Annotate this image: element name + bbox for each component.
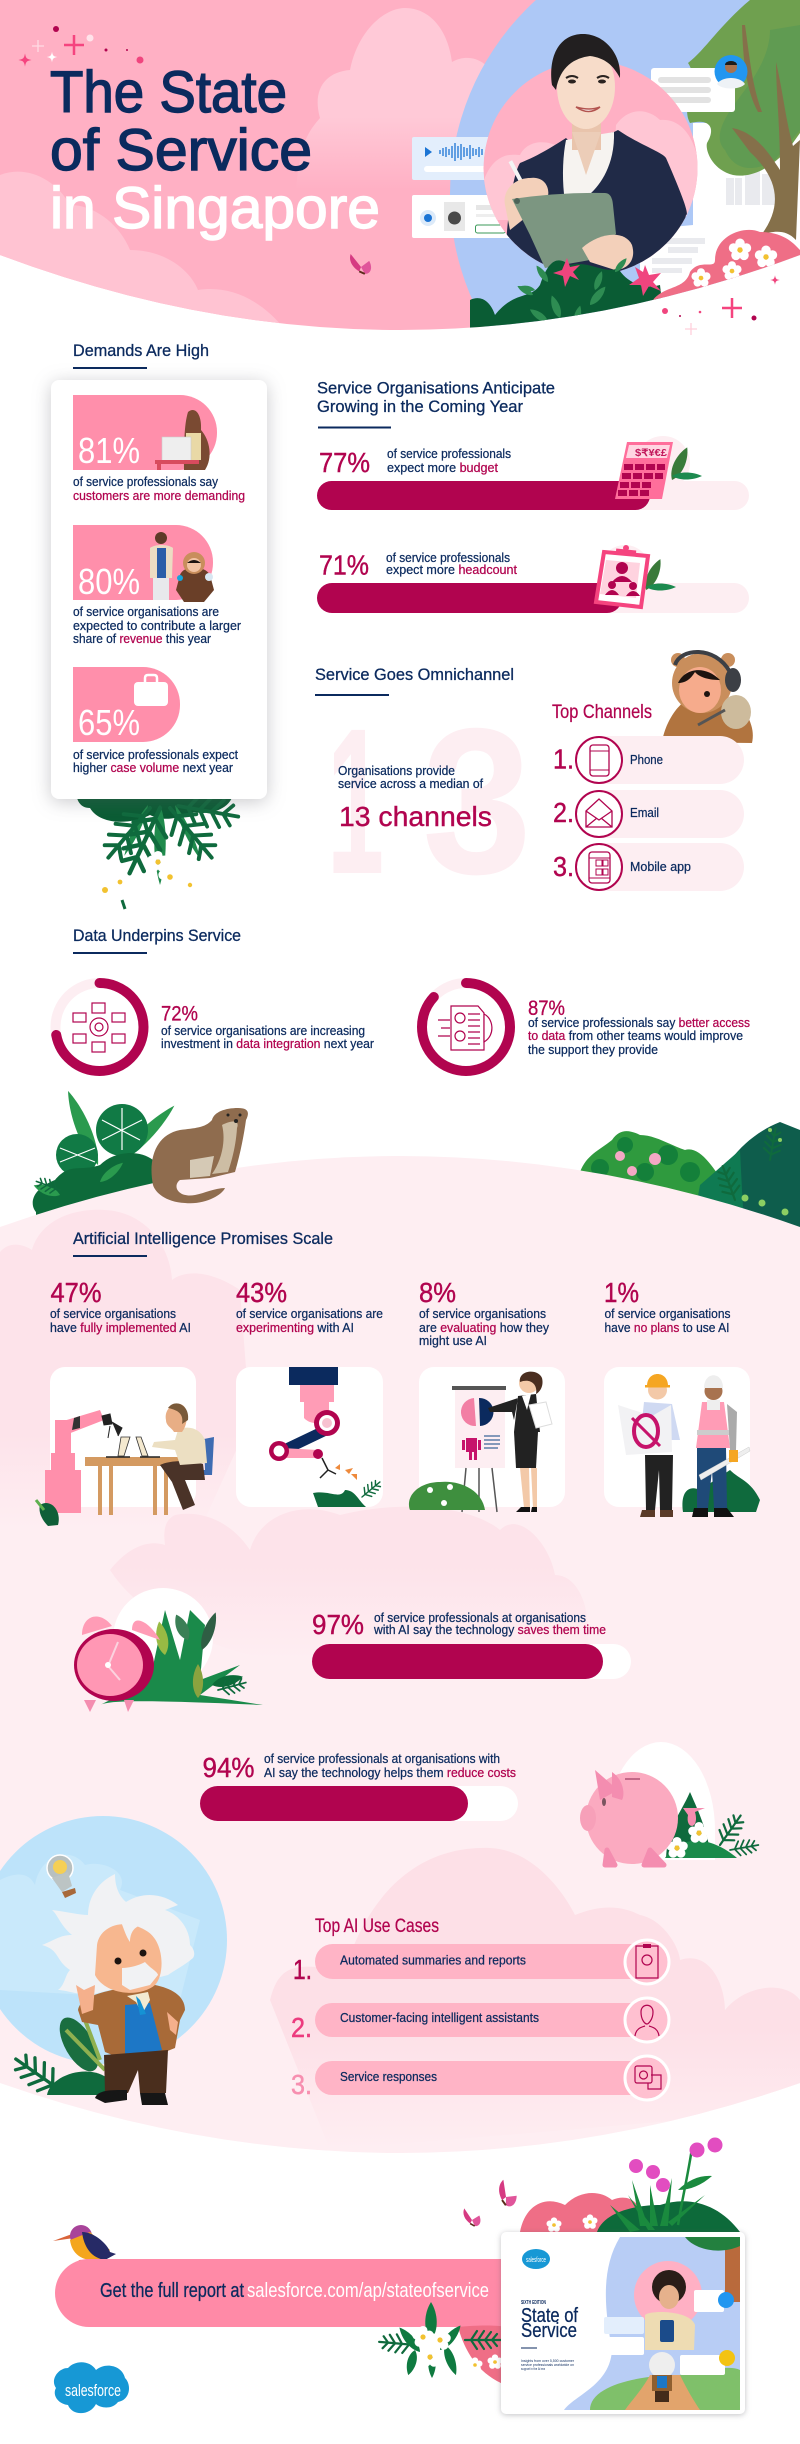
head	[95, 1924, 162, 1993]
use case 1	[293, 1940, 669, 1985]
bar: 77% budget	[317, 436, 749, 510]
audio card	[412, 137, 490, 180]
blue circle backdrop	[450, 0, 800, 326]
stat: 81%: 81%	[78, 430, 140, 471]
stat: 1% no plans: have no plans to use AI	[604, 1320, 730, 1335]
bar: 77% budget: expect more budget	[387, 460, 498, 475]
chat card	[651, 55, 748, 112]
card: presenter at flip chart	[409, 1367, 565, 1512]
stat: 87% data access: the support they provide	[528, 1042, 658, 1057]
panel: call to action: Get the full report at	[100, 2280, 244, 2302]
pink flowers	[553, 258, 661, 296]
foliage	[8, 2011, 110, 2101]
stat: 80%: share of revenue this year	[73, 631, 212, 646]
stat: 80%	[73, 525, 242, 646]
panel: report cover	[501, 2232, 745, 2414]
bar: 71% headcount: of service professionals	[386, 550, 510, 565]
card: robot arm and worker	[45, 1367, 214, 1515]
icon: light bulb	[47, 1855, 76, 1898]
heading: service organisations anticipate growing	[317, 378, 555, 428]
stat: 8% evaluating: are evaluating how they	[419, 1320, 549, 1335]
stat: 94% reduce costs: 94%	[202, 1752, 254, 1783]
stat: 72% data integration	[56, 983, 375, 1071]
channel 3: mobile app: 3.	[553, 851, 574, 882]
illustration: left jungle	[32, 1088, 179, 1222]
channel 3: mobile app	[553, 843, 744, 891]
use case 1: 1.	[293, 1954, 312, 1985]
bar: 71% headcount: 71%	[319, 550, 369, 580]
panel: top AI use cases: Top AI Use Cases	[315, 1916, 439, 1937]
icon: calculator: $₹¥€£	[635, 448, 667, 459]
heading: artificial intelligence promises scale: Artificial Intelligence Promises Scale	[73, 1229, 333, 1248]
hero banner	[0, 0, 800, 330]
stat: 72% data integration: of service organisations are increasing	[161, 1023, 365, 1038]
logo: salesforce: salesforce	[65, 2381, 121, 2400]
heading: demands are high	[73, 341, 209, 369]
channel 2: email	[553, 790, 744, 838]
channel 1: phone: 1.	[553, 744, 574, 774]
stat: 97% saves time	[74, 1588, 631, 1712]
big number 13: 3	[422, 686, 532, 918]
text: median channels	[338, 763, 492, 832]
stat: 43% experimenting: experimenting with AI	[236, 1320, 354, 1335]
stat: 80%: 80%	[78, 561, 140, 602]
stat: 8% evaluating: might use AI	[419, 1333, 487, 1348]
building	[640, 123, 800, 300]
illustration: cta foliage	[378, 2302, 505, 2385]
stat: 65%: higher case volume next year	[73, 760, 234, 775]
panel: call to action	[55, 2259, 520, 2327]
icon: document checklist	[438, 1006, 492, 1050]
icon: alarm clock with plants	[74, 1588, 263, 1712]
woman hands and tablet	[505, 160, 633, 270]
big number 13	[327, 686, 532, 918]
icon: mascot with headset	[662, 652, 753, 743]
bar: 71% headcount: expect more headcount	[386, 562, 517, 577]
icon: calculator	[615, 442, 702, 499]
body	[78, 1985, 185, 2060]
title: of Service	[50, 118, 312, 183]
cover blurb: support in the AI era	[521, 2366, 546, 2371]
bar: 77% budget: 77%	[319, 447, 370, 478]
illustration: orchids and bush	[520, 2138, 740, 2232]
stat: 47% fully implemented: of service organisations	[50, 1306, 176, 1321]
avatar	[714, 55, 748, 88]
stat: 65%: of service professionals expect	[73, 747, 238, 762]
use case 3: Service responses	[340, 2069, 437, 2084]
title	[50, 60, 380, 241]
woman head	[551, 34, 620, 175]
pale pink lower section	[0, 1156, 800, 2153]
channel 3: mobile app: Mobile app	[630, 859, 691, 874]
stat: 43% experimenting: 43%	[236, 1277, 287, 1308]
heading: service goes omnichannel: Service Goes Omnichannel	[315, 665, 514, 684]
hero clouds	[0, 8, 492, 340]
channel 2: email: 2.	[553, 797, 574, 828]
pink bush	[653, 230, 800, 300]
stat: 72% data integration: investment in data integration next year	[161, 1036, 375, 1051]
icon: man and mascot	[150, 532, 214, 602]
stat: 43% experimenting	[236, 1277, 384, 1507]
stat: 81%: of service professionals say	[73, 474, 218, 489]
card: robot arm with plant	[236, 1367, 384, 1507]
card: construction workers	[604, 1367, 760, 1517]
illustration: mascot Einstein	[0, 1816, 227, 2105]
cover logo	[522, 2249, 550, 2269]
use case 2: 2.	[291, 2012, 312, 2043]
panel: top channels	[552, 652, 753, 891]
text: median channels: Organisations provide	[338, 763, 455, 778]
sparkles lower right	[662, 275, 780, 335]
heading: service organisations anticipate growing: Growing in the Coming Year	[317, 397, 523, 416]
stat: 8% evaluating	[409, 1277, 565, 1512]
logo: salesforce	[54, 2362, 129, 2413]
stat: 8% evaluating: of service organisations	[419, 1306, 546, 1321]
stat: 65%: 65%	[78, 702, 140, 743]
cover blurb: service professionals worldwide on	[521, 2362, 574, 2367]
stat: 47% fully implemented: have fully implemented AI	[50, 1320, 191, 1335]
text: median channels: service across a median of	[338, 776, 483, 791]
stat: 72% data integration: 72%	[161, 1002, 198, 1026]
cover logo: salesforce	[526, 2257, 546, 2264]
icon: butterfly small	[463, 2206, 481, 2228]
icon: person at desk	[155, 410, 210, 470]
icon: butterfly large	[495, 2179, 520, 2208]
stat: 87% data access: to data from other teams would improve	[528, 1028, 743, 1043]
small foliage	[36, 1500, 59, 1526]
stat: 94% reduce costs: AI say the technology helps them reduce costs	[264, 1765, 516, 1780]
use case 2: Customer-facing intelligent assistants	[340, 2010, 539, 2025]
stat: 43% experimenting: of service organisations are	[236, 1306, 383, 1321]
stat: 1% no plans: 1%	[604, 1277, 639, 1308]
stat: 87% data access	[422, 983, 750, 1071]
stat: 97% saves time: of service professionals at organisations	[374, 1610, 586, 1625]
stat: 87% data access: 87%	[528, 997, 565, 1020]
bar: 71% headcount	[317, 545, 749, 613]
title: in Singapore	[50, 176, 380, 241]
panel: call to action: salesforce.com/ap/stateofservice	[247, 2280, 489, 2302]
use case 2	[291, 1998, 669, 2043]
product card	[412, 195, 512, 238]
stat: 87% data access: of service professionals say better access	[528, 1015, 750, 1030]
panel: demands card	[51, 380, 267, 799]
stat: 47% fully implemented	[36, 1277, 214, 1526]
heading: demands are high: Demands Are High	[73, 341, 209, 360]
use case 1: Automated summaries and reports	[340, 1952, 526, 1968]
stat: 97% saves time: with AI say the technology saves them time	[373, 1622, 606, 1637]
channel 1: phone: Phone	[630, 752, 663, 767]
bar: 77% budget: of service professionals	[387, 446, 511, 461]
stat: 80%: expected to contribute a larger	[73, 618, 242, 633]
section clouds	[0, 1210, 800, 2150]
hero sparkles	[18, 26, 143, 67]
icon: briefcase	[134, 675, 168, 706]
panel: top channels: Top Channels	[552, 702, 652, 723]
stat: 94% reduce costs	[200, 1742, 760, 1865]
title: The State	[50, 60, 287, 125]
panel: report cover: SIXTH EDITION	[521, 2300, 546, 2306]
icon: clipboard	[596, 545, 676, 607]
use case 3: 3.	[291, 2069, 312, 2100]
stat: 97% saves time: 97%	[312, 1609, 364, 1640]
cover blurb	[521, 2358, 575, 2371]
stat: 80%: of service organisations are	[73, 604, 219, 619]
tree	[687, 0, 800, 240]
text: median channels: 13 channels	[339, 801, 492, 832]
stat: 8% evaluating: 8%	[419, 1277, 456, 1308]
stat: 1% no plans: of service organisations	[604, 1306, 731, 1321]
illustration: right jungle	[579, 1122, 800, 1240]
woman photo	[484, 61, 700, 280]
donut chart 87	[422, 983, 510, 1071]
donut chart 72	[56, 983, 144, 1071]
stat: 1% no plans	[604, 1277, 760, 1517]
stat: 81%: customers are more demanding	[73, 488, 245, 503]
big number 13: 1	[327, 686, 384, 918]
foreground foliage	[470, 258, 662, 328]
heading: service organisations anticipate growing: Service Organisations Anticipate	[317, 378, 555, 398]
pink circle behind woman	[484, 61, 698, 275]
panel: top AI use cases	[291, 1916, 669, 2100]
channel 1: phone	[553, 736, 744, 784]
cover title	[521, 2305, 578, 2342]
icon: data folders	[73, 1003, 125, 1052]
small clouds in circle	[484, 111, 700, 230]
icon: kingfisher	[53, 2225, 116, 2268]
foliage below card	[76, 790, 241, 909]
use case 3	[291, 2056, 669, 2100]
cover blurb: Insights from over 5,500 customer	[521, 2358, 575, 2363]
icon: butterfly	[349, 250, 373, 277]
cover title: State of	[521, 2305, 578, 2327]
illustration: otter	[151, 1108, 248, 1203]
cover illustration	[564, 2237, 740, 2410]
icon: piggy bank	[580, 1742, 760, 1865]
stat: 94% reduce costs: of service professionals at organisations with	[264, 1751, 500, 1766]
stat: 65%	[73, 667, 238, 775]
stat: 81%	[73, 395, 245, 503]
stat: 47% fully implemented: 47%	[50, 1277, 102, 1308]
heading: data underpins service: Data Underpins Service	[73, 926, 241, 945]
hair	[42, 1874, 194, 1995]
cover title: Service	[521, 2320, 577, 2342]
channel 2: email: Email	[630, 805, 659, 820]
